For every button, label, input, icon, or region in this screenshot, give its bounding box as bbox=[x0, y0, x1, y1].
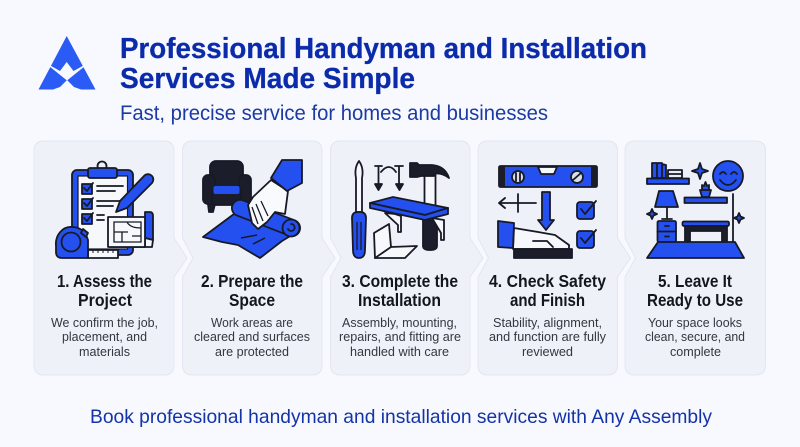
panel: step 2 prepare the space bbox=[182, 141, 335, 375]
step 4 heading bbox=[489, 271, 606, 310]
step 4 heading: and Finish bbox=[510, 290, 585, 310]
subtitle: Fast, precise service for homes and businesses bbox=[120, 101, 548, 125]
step 1 description: We confirm the job, bbox=[51, 315, 158, 330]
icon: clipboard, tape measure and blueprint bbox=[56, 162, 153, 258]
step 3 description: handled with care bbox=[350, 344, 449, 359]
step 4 description: and function are fully bbox=[489, 329, 606, 344]
card shape 2 bbox=[182, 141, 335, 375]
step 3 description: repairs, and fitting are bbox=[339, 329, 461, 344]
step 1 heading: Project bbox=[78, 290, 132, 310]
title: Professional Handyman and Installation bbox=[120, 33, 647, 65]
step 1 description bbox=[51, 315, 158, 359]
step 3 description bbox=[339, 315, 461, 359]
title bbox=[120, 33, 647, 95]
panel: step 5 leave it ready to use bbox=[625, 141, 766, 375]
icon: brand logo bbox=[38, 36, 96, 90]
icon: tidy room with smiley bbox=[647, 161, 744, 258]
step 1 heading: 1. Assess the bbox=[57, 271, 152, 291]
card shape 4 bbox=[478, 141, 630, 375]
step 4 description: reviewed bbox=[522, 344, 573, 359]
step 5 description bbox=[645, 315, 745, 359]
step 4 description: Stability, alignment, bbox=[493, 315, 602, 330]
step 1 description: materials bbox=[79, 344, 130, 359]
step 3 description: Assembly, mounting, bbox=[342, 315, 457, 330]
step 2 description bbox=[194, 315, 310, 359]
step 3 heading bbox=[342, 271, 458, 310]
step 4 description bbox=[489, 315, 606, 359]
step 1 heading bbox=[57, 271, 152, 310]
step 2 description: cleared and surfaces bbox=[194, 329, 310, 344]
step 4 heading: 4. Check Safety bbox=[489, 271, 606, 291]
panel: step 1 assess the project bbox=[34, 141, 187, 375]
step 5 description: complete bbox=[670, 344, 721, 359]
step 5 heading bbox=[647, 271, 743, 310]
card shape 3 bbox=[330, 141, 483, 375]
icon: screwdriver, hardware, hammer and shelf bbox=[352, 161, 449, 258]
footer call to action: Book professional handyman and installation services with Any Assembly bbox=[90, 406, 712, 428]
panel: step 3 complete the installation bbox=[330, 141, 483, 375]
card shape 1 bbox=[34, 141, 187, 375]
step 2 heading: Space bbox=[229, 290, 275, 310]
step 5 description: Your space looks bbox=[648, 315, 742, 330]
step 3 heading: 3. Complete the bbox=[342, 271, 458, 291]
step 1 description: placement, and bbox=[62, 329, 147, 344]
step 2 heading: 2. Prepare the bbox=[201, 271, 303, 291]
title: Services Made Simple bbox=[120, 63, 415, 95]
step 5 heading: Ready to Use bbox=[647, 290, 743, 310]
step 5 heading: 5. Leave It bbox=[658, 271, 732, 291]
step 2 description: are protected bbox=[215, 344, 289, 359]
card shape 5 bbox=[625, 141, 766, 375]
icon: armchair, hand and rolled protective sheet bbox=[203, 160, 302, 258]
step 2 heading bbox=[201, 271, 303, 310]
step 2 description: Work areas are bbox=[211, 315, 293, 330]
icon: spirit level, arrows, hand and checkboxes bbox=[498, 166, 597, 258]
panel: step 4 check safety and finish bbox=[478, 141, 630, 375]
step 3 heading: Installation bbox=[358, 290, 441, 310]
step 5 description: clean, secure, and bbox=[645, 329, 745, 344]
